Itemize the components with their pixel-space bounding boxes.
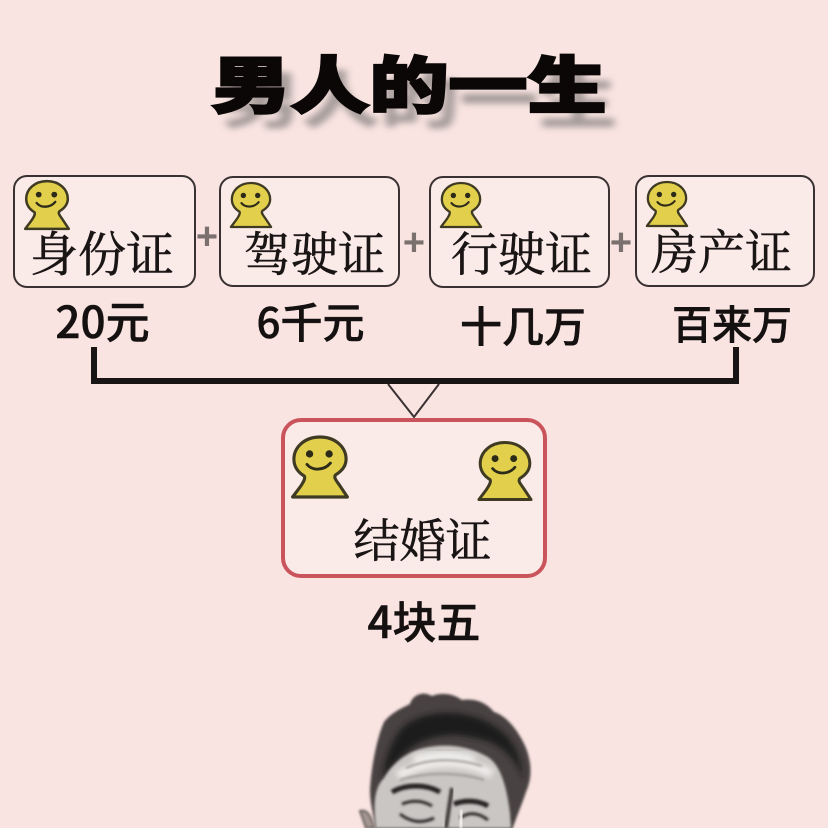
title: 男人的一生 <box>212 36 606 125</box>
plus sign 3: + <box>610 222 632 264</box>
icon: yellow figure <box>440 182 482 228</box>
price: marriage certificate: 4块五 <box>367 587 481 651</box>
title: 男人的一生 <box>222 51 618 140</box>
panel: marriage certificate <box>281 418 547 578</box>
plus sign 1: + <box>196 216 218 258</box>
plus sign 2: + <box>403 222 425 264</box>
illustration: tired man <box>358 692 532 828</box>
label: marriage certificate: 结婚证 <box>354 505 492 571</box>
panel: driving licence <box>219 176 400 287</box>
label: driving licence: 驾驶证 <box>244 218 385 285</box>
label: ID card: 身份证 <box>30 216 174 285</box>
label: property deed: 房产证 <box>651 216 792 283</box>
label: vehicle licence: 行驶证 <box>451 218 592 285</box>
price: vehicle licence: 十几万 <box>460 294 586 355</box>
price: ID card: 20元 <box>55 287 150 351</box>
icon: yellow figure right <box>477 441 532 501</box>
icon: yellow figure <box>646 180 688 228</box>
panel: vehicle licence <box>429 176 610 288</box>
panel: property deed <box>635 175 815 287</box>
bracket connector with triangle arrow <box>91 347 739 418</box>
panel: ID card <box>13 175 196 288</box>
icon: yellow figure <box>24 180 70 230</box>
price: driving licence: 6千元 <box>257 290 364 351</box>
icon: yellow figure left <box>291 435 349 499</box>
price: property deed: 百来万 <box>672 293 792 351</box>
icon: yellow figure <box>230 182 272 228</box>
